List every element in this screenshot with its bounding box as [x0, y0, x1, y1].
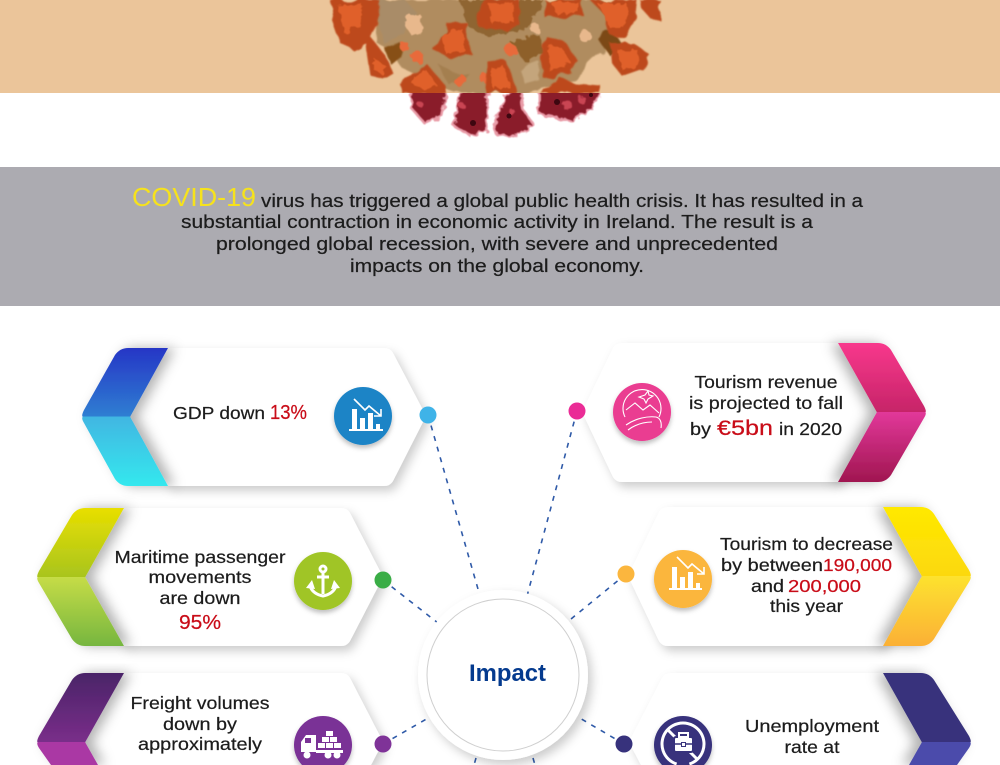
- text: tourism decrease: Tourism to decrease: [720, 534, 893, 554]
- chevron: yellow: [883, 507, 971, 646]
- text: tourism decrease: and: [751, 576, 784, 596]
- text block: intro paragraph: prolonged global recession, with severe and unprecedented: [216, 233, 778, 254]
- text: maritime: 95%: [179, 612, 221, 634]
- text: GDP down 13%: [173, 402, 307, 424]
- text: maritime: are down: [160, 588, 240, 608]
- node dot: [374, 736, 392, 752]
- text: tourism decrease: 200,000: [788, 576, 861, 596]
- node dot: [420, 406, 436, 424]
- text block: intro paragraph: virus has triggered a global public health crisis. It has resulted in a: [261, 190, 864, 211]
- panel: GDP: [82, 348, 436, 486]
- text: GDP down 13%: 13%: [270, 402, 307, 424]
- chevron: green: [37, 508, 124, 646]
- panel: tourism decrease: [618, 507, 971, 646]
- text: tourism revenue: Tourism revenue: [694, 372, 838, 392]
- text: unemployment: rate at: [784, 737, 840, 757]
- orange spikes: [330, 0, 660, 93]
- text: tourism decrease: [720, 534, 893, 616]
- connectors: dashed lines to centre: [383, 411, 626, 765]
- chevron: purple: [37, 673, 124, 765]
- text: tourism revenue: [689, 372, 843, 440]
- text: tourism revenue: by: [690, 419, 711, 439]
- pale spots: [405, 14, 591, 42]
- node dot: [616, 736, 632, 752]
- text: freight: [130, 693, 270, 754]
- icon: plane and landscape: [613, 383, 671, 441]
- text: tourism revenue: in 2020: [779, 419, 842, 439]
- text: maritime: movements: [148, 567, 252, 587]
- panel: unemployment: [616, 673, 971, 765]
- centre circle: Impact: [418, 590, 588, 760]
- chevron: blue: [82, 348, 168, 486]
- text: tourism decrease: 190,000: [823, 555, 892, 575]
- icon: no briefcase: [654, 716, 712, 765]
- text: maritime: [114, 547, 286, 634]
- icon: truck: [294, 716, 352, 765]
- text block: intro paragraph: substantial contraction in economic activity in Ireland. The result is a: [181, 211, 814, 232]
- text: maritime: Maritime passenger: [114, 547, 286, 567]
- text: tourism revenue: is projected to fall: [689, 393, 843, 413]
- illustration: coronavirus: [330, 0, 660, 135]
- panel: maritime: [37, 508, 391, 646]
- text: freight: Freight volumes: [130, 693, 270, 713]
- panel: tourism revenue: [568, 343, 926, 482]
- text: tourism decrease: this year: [770, 596, 843, 616]
- text: GDP down 13%: GDP down: [173, 403, 265, 423]
- text block: intro paragraph: impacts on the global economy.: [350, 255, 644, 276]
- background band: peach header: [0, 0, 1000, 93]
- chevron: indigo: [883, 673, 971, 765]
- text: freight: approximately: [138, 734, 262, 754]
- icon: falling bar chart: [334, 387, 392, 445]
- icon: anchor: [294, 552, 352, 610]
- chevron: pink: [838, 343, 926, 482]
- text: tourism revenue: €5bn: [717, 417, 773, 440]
- text: tourism decrease: by between: [721, 555, 823, 575]
- panel: intro text band: [0, 167, 1000, 306]
- node dot: [618, 566, 634, 582]
- panel: freight: [37, 673, 391, 765]
- text: unemployment: Unemployment: [745, 716, 879, 736]
- text: freight: down by: [163, 714, 237, 734]
- icon: falling bar chart: [654, 550, 712, 608]
- text block: intro paragraph: [181, 190, 864, 276]
- node dot: [374, 572, 392, 588]
- node dot: [568, 402, 586, 420]
- label: Impact: Impact: [469, 660, 546, 687]
- text: unemployment: [745, 716, 879, 757]
- spike highlights: [338, 2, 640, 90]
- heading: COVID-19: COVID-19: [132, 182, 256, 212]
